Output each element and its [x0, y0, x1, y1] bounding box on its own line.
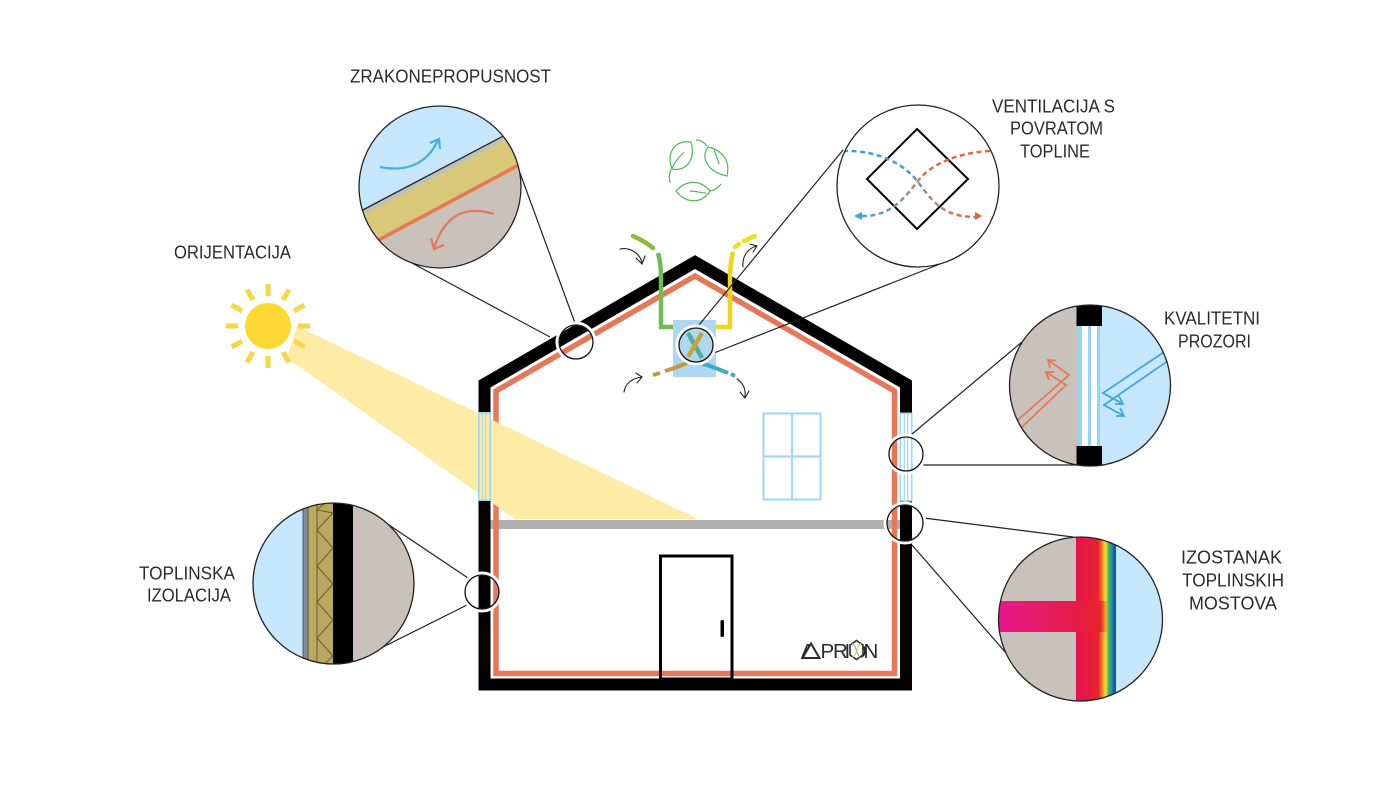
exhaust pipe: [704, 236, 755, 327]
inner airtight layer: [496, 276, 894, 674]
label: airtightness: ZRAKONEPROPUSNOST: [350, 66, 551, 86]
floor slab: [490, 520, 902, 529]
door: [660, 556, 732, 679]
label: heat recovery ventilation: [992, 96, 1115, 162]
label: quality windows: [1164, 308, 1260, 352]
heat exchanger unit: [673, 320, 716, 377]
interior window: [764, 414, 820, 500]
ventilation pipes: [620, 236, 757, 398]
label: heat recovery ventilation: VENTILACIJA S: [992, 96, 1115, 116]
detail: thermal insulation: [250, 500, 418, 670]
label: thermal insulation: IZOLACIJA: [147, 584, 232, 606]
logo: APRION: [801, 640, 878, 663]
sunlight beam: [287, 326, 698, 519]
label: no thermal bridges: MOSTOVA: [1189, 592, 1278, 614]
outer wall: [484, 262, 906, 684]
label: heat recovery ventilation: POVRATOM: [1010, 118, 1103, 138]
icon: recycling leaves: [669, 140, 728, 201]
label: quality windows: KVALITETNI: [1164, 308, 1260, 328]
outlet duct: [703, 364, 735, 376]
connector lines: [383, 150, 1077, 653]
detail: heat recovery ventilation: [837, 105, 999, 267]
house: [287, 262, 912, 684]
label: quality windows: PROZORI: [1178, 330, 1251, 352]
right wall window: [900, 412, 912, 501]
label: no thermal bridges: IZOSTANAK: [1181, 546, 1283, 568]
air flow arrows: [620, 244, 757, 398]
label: orientation: ORIJENTACIJA: [174, 242, 292, 262]
left wall window: [478, 412, 491, 501]
orange air arrow: [431, 211, 494, 249]
magnifier markers: [464, 324, 924, 610]
label: thermal insulation: TOPLINSKA: [139, 562, 236, 584]
blue air arrow: [380, 139, 440, 169]
label: no thermal bridges: TOPLINSKIH: [1182, 570, 1284, 590]
intake duct: [653, 363, 687, 375]
detail: quality windows: [1008, 304, 1172, 467]
detail: no thermal bridges: [998, 536, 1164, 702]
label: thermal insulation: [139, 562, 236, 606]
label: heat recovery ventilation: TOPLINE: [1020, 140, 1090, 162]
orange heat arrows: [1018, 360, 1069, 427]
icon: sun: [226, 284, 310, 368]
detail: airtightness: [358, 105, 522, 269]
fresh air pipe: [633, 236, 690, 327]
blue cold arrows: [1103, 348, 1172, 416]
label: no thermal bridges: [1181, 546, 1284, 614]
